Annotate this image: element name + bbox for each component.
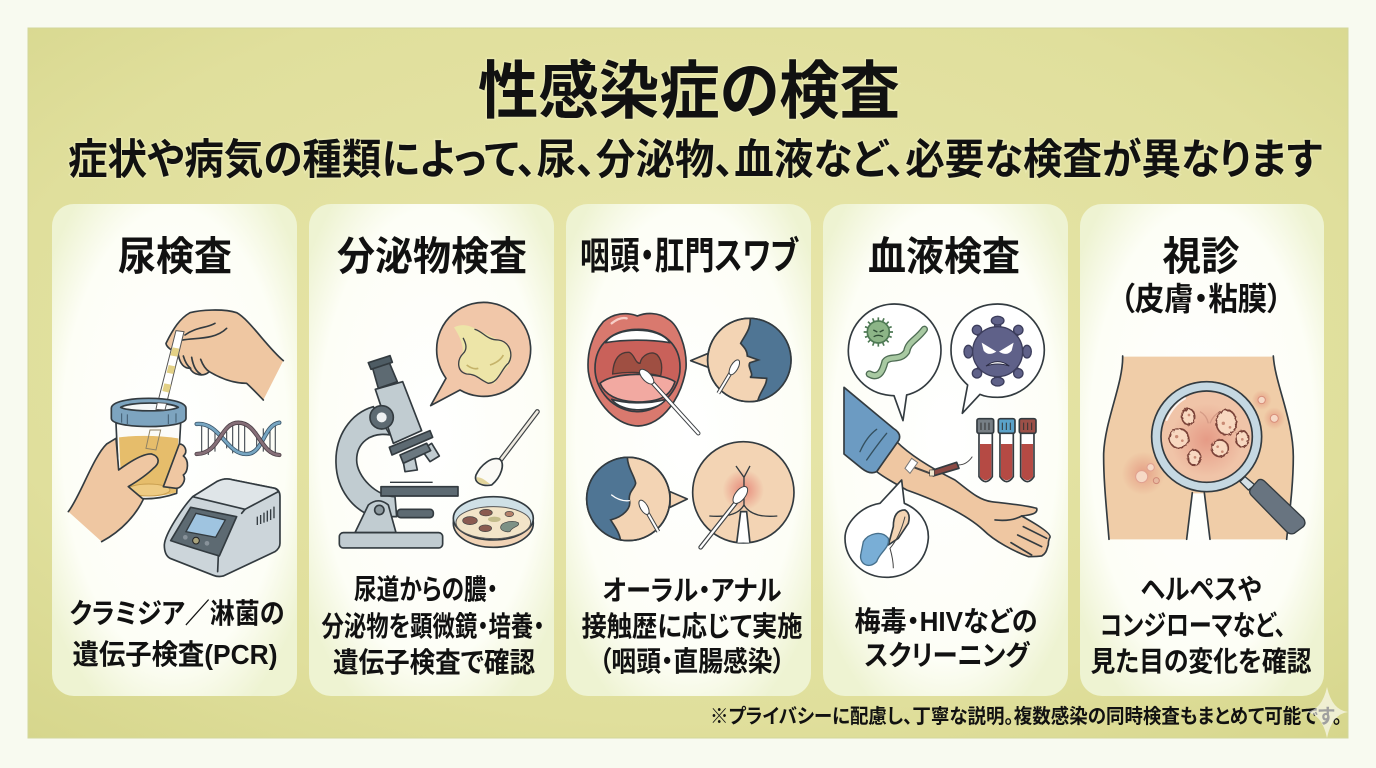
illustration: urine cup, hands, DNA, PCR machine — [68, 310, 283, 577]
icon: speech bubble with discharge — [431, 302, 531, 406]
icon: PCR machine — [164, 479, 280, 577]
subtitle: 症状や病気の種類によって、尿、分泌物、血液など、必要な検査が異なります — [68, 136, 1322, 183]
icon: sleeve — [844, 387, 900, 473]
panel: visual examination — [1080, 204, 1324, 696]
description: discharge test: 分泌物を顕微鏡・培養・ — [322, 611, 544, 642]
icon: DNA helix — [197, 423, 279, 455]
icon: anal swab circle — [693, 442, 794, 547]
heading: blood test: 血液検査 — [868, 235, 1020, 279]
heading: visual examination — [1120, 235, 1282, 317]
description: visual examination: コンジローマなど、 — [1100, 610, 1286, 641]
icon: face profile bubble top — [691, 317, 797, 403]
description: throat and anal swab: オーラル・アナル — [602, 575, 782, 606]
illustration: skin inspection with magnifier — [1103, 356, 1305, 539]
icon: cotton swab — [476, 412, 537, 485]
footnote: ※プライバシーに配慮し、丁寧な説明。複数感染の同時検査もまとめて可能です。 — [710, 704, 1342, 728]
title: 性感染症の検査 — [478, 57, 900, 127]
description: throat and anal swab: （咽頭・直腸感染） — [599, 646, 785, 677]
icon: urine cup — [111, 398, 186, 499]
description: blood test: スクリーニング — [864, 639, 1031, 671]
description: blood test — [854, 606, 1038, 671]
icon: syringe — [905, 457, 972, 476]
panel: throat and anal swab — [566, 204, 811, 696]
icon: bacteria bubble — [848, 304, 941, 421]
icon: microscope — [336, 356, 458, 548]
heading: visual examination: （皮膚・粘膜） — [1120, 281, 1282, 317]
description: visual examination: ヘルペスや — [1140, 574, 1262, 605]
panel: blood test — [823, 204, 1068, 696]
icon: sparkle — [1306, 687, 1348, 738]
heading: discharge test: 分泌物検査 — [337, 235, 527, 279]
heading: urine test: 尿検査 — [118, 235, 232, 279]
icon: lesions on skin — [1122, 390, 1285, 495]
panel: discharge test — [309, 204, 554, 696]
description: throat and anal swab: 接触歴に応じて実施 — [582, 611, 802, 642]
icon: face profile bubble bottom — [580, 455, 687, 542]
description: discharge test — [322, 574, 544, 678]
description: urine test — [70, 598, 284, 670]
description: urine test: クラミジア／淋菌の — [70, 598, 284, 629]
description: throat and anal swab — [582, 575, 802, 677]
icon: lower hand — [68, 438, 187, 542]
description: visual examination: 見た目の変化を確認 — [1090, 646, 1312, 677]
icon: arm — [877, 442, 1050, 557]
description: urine test: 遺伝子検査(PCR) — [72, 639, 278, 670]
description: visual examination — [1090, 574, 1312, 677]
panel: urine test — [52, 204, 297, 696]
icon: open mouth — [588, 313, 698, 433]
icon: virus bubble — [951, 304, 1044, 413]
illustration: blood draw and pathogens — [844, 304, 1050, 577]
illustration: microscope, swab, petri dish — [336, 302, 537, 548]
illustration: swab sites — [580, 313, 797, 547]
heading: throat and anal swab: 咽頭・肛門スワブ — [580, 235, 799, 278]
description: discharge test: 遺伝子検査で確認 — [333, 647, 535, 678]
heading: visual examination: 視診 — [1162, 235, 1240, 279]
icon: blood tubes — [977, 419, 1036, 482]
icon: ulcer bubble — [845, 480, 928, 577]
description: blood test: 梅毒・HIVなどの — [854, 606, 1038, 637]
icon: upper hand — [166, 310, 283, 400]
icon: petri dish — [453, 497, 533, 547]
icon: magnifier — [1152, 382, 1305, 534]
description: discharge test: 尿道からの膿・ — [354, 574, 498, 605]
icon: test strip — [156, 331, 184, 410]
icon: body — [1103, 356, 1293, 539]
